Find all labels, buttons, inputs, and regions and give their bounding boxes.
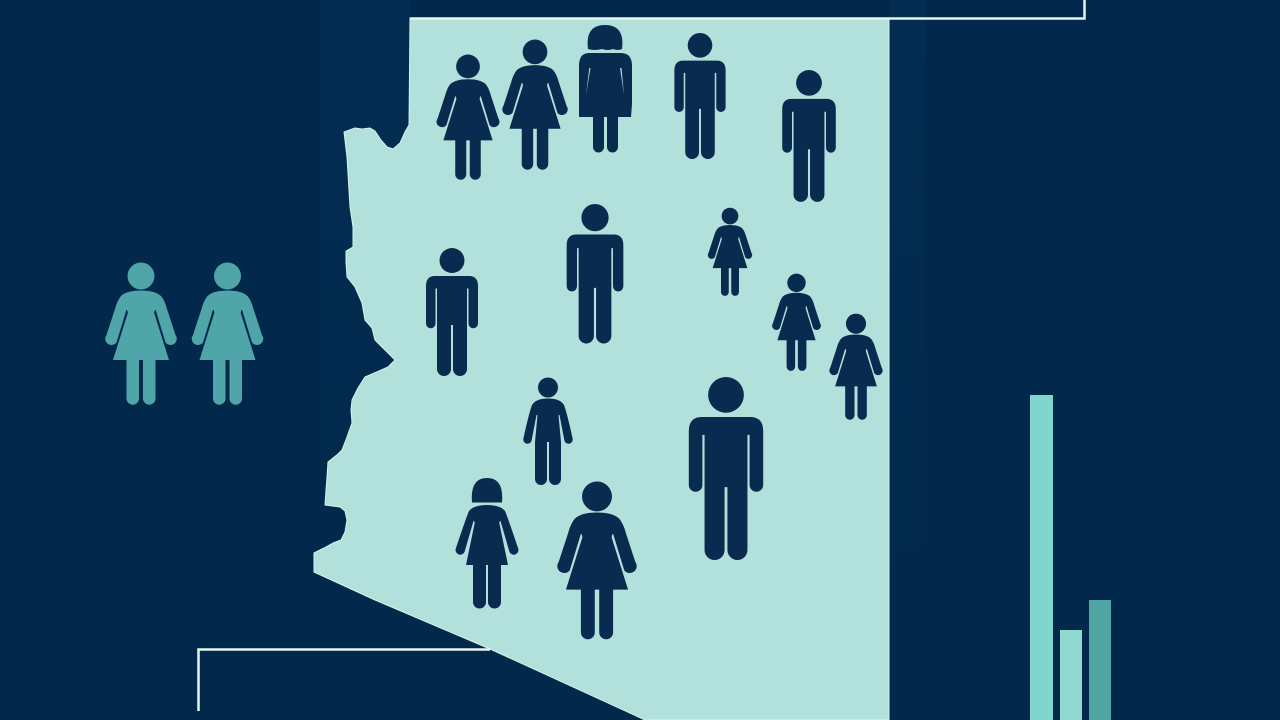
bar 1 [1030,395,1053,720]
large man 6 [689,377,763,560]
small man 5 [523,378,573,485]
frame line: top right [410,0,1084,18]
woman 8 [557,481,637,639]
woman 2 [502,40,568,170]
woman 7 with short hair [456,478,518,608]
woman 1 [437,55,499,180]
icon: two women, left side [105,262,263,405]
man 3 [567,204,623,344]
small woman 5 [772,274,821,371]
map: state of Arizona [314,18,889,720]
bar 3 [1089,600,1111,720]
small woman 6 [829,314,883,420]
man 2 [782,70,836,202]
frame line: bottom left [198,650,490,711]
bar 2 [1060,630,1082,720]
bar chart [1030,395,1111,720]
man 4 [426,248,478,376]
woman 3 with short hair [579,25,632,152]
man 1 [674,33,726,159]
small woman 4 [708,208,752,296]
group of people on map [426,25,883,639]
